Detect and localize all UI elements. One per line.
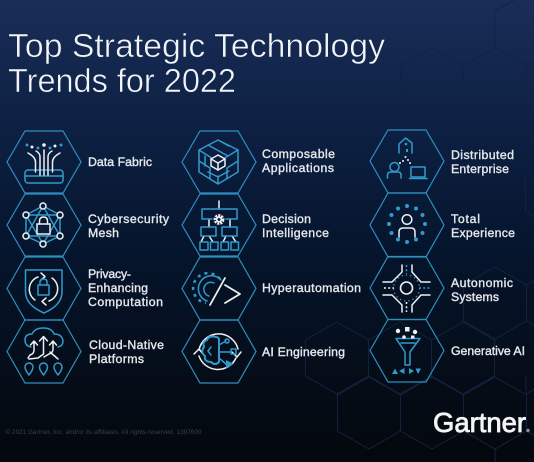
trend: Privacy-Enhancing Computation	[7, 257, 163, 320]
label: Total	[451, 212, 480, 226]
label: Platforms	[89, 352, 144, 366]
trend: Total Experience	[370, 193, 515, 257]
icon: decision tree with gear	[200, 201, 238, 250]
label: Hyperautomation	[262, 281, 361, 295]
label	[262, 212, 329, 240]
label: Data Fabric	[88, 155, 152, 169]
background hexagon pattern	[306, 0, 534, 462]
copyright footer: © 2021 Gartner, Inc. and/or its affiliates. All rights reserved. 1397600	[6, 429, 202, 436]
label: Enterprise	[451, 162, 509, 176]
icon: house, person and laptop	[388, 138, 427, 178]
trend: Cybersecurity Mesh	[7, 194, 170, 256]
icon: shield with lock	[26, 270, 62, 313]
trend: Cloud-Native Platforms	[7, 320, 164, 383]
icon: brain with cycle arrows	[194, 334, 241, 369]
label	[88, 267, 163, 309]
label: Experience	[451, 226, 515, 240]
label	[451, 212, 515, 240]
trend: Decision Intelligence	[182, 194, 329, 256]
trend: Hyperautomation	[182, 257, 361, 320]
gartner logo: Gartner	[433, 407, 526, 438]
trend: AI Engineering	[182, 320, 345, 383]
label	[88, 212, 170, 240]
trend: Autonomic Systems	[370, 256, 513, 320]
icon: person in dot ring	[387, 204, 427, 244]
label: Computation	[88, 295, 163, 309]
label: Systems	[451, 290, 499, 304]
icon: cloud with pins	[25, 328, 63, 375]
icon: funnel	[392, 327, 421, 374]
icon: roundabout	[383, 265, 430, 312]
trend: Data Fabric	[7, 131, 152, 193]
label: Composable	[262, 147, 335, 161]
title: Top Strategic Technology	[8, 27, 386, 64]
label: Privacy-	[88, 267, 131, 281]
trend: Distributed Enterprise	[370, 130, 514, 193]
label: Applications	[262, 161, 334, 175]
icon: cybersecurity mesh	[23, 203, 63, 247]
icon: data fabric	[25, 143, 63, 183]
label: Cloud-Native	[89, 338, 164, 352]
label: Mesh	[88, 226, 119, 240]
trend: Composable Applications	[182, 131, 335, 193]
title	[8, 27, 386, 99]
label: Distributed	[451, 148, 514, 162]
title: Trends for 2022	[8, 62, 236, 99]
label	[451, 276, 513, 304]
label: Cybersecurity	[88, 212, 170, 226]
label	[262, 147, 335, 175]
label: Enhancing	[88, 281, 148, 295]
label	[89, 338, 164, 366]
label: Generative AI	[451, 344, 525, 358]
trend: Generative AI	[370, 320, 525, 382]
label: Intelligence	[262, 226, 329, 240]
label: Decision	[262, 212, 311, 226]
label	[451, 148, 514, 176]
label: Autonomic	[451, 276, 513, 290]
icon: gear and code	[193, 273, 240, 305]
label: AI Engineering	[262, 345, 345, 359]
icon: composable cube	[199, 140, 238, 184]
